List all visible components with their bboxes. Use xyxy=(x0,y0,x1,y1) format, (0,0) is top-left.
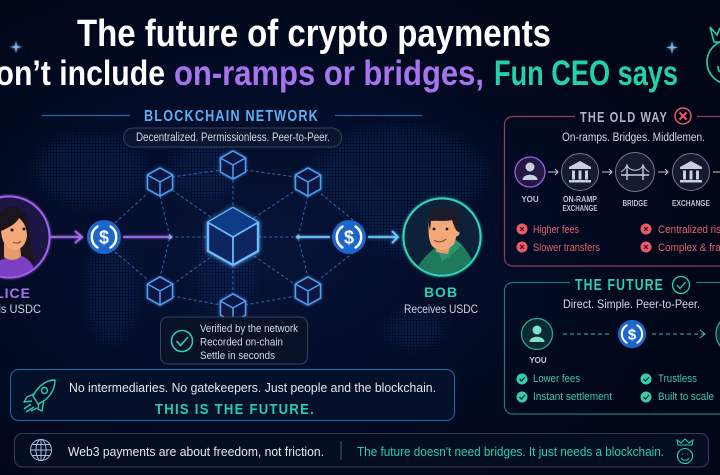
flow step: bridge xyxy=(616,152,654,208)
flow: dashed arrow xyxy=(563,330,705,338)
flow step: on-ramp exchange: EXCHANGE xyxy=(562,204,598,213)
arrow: alice to coin xyxy=(50,231,170,243)
list: benefits: Trustless xyxy=(658,373,697,385)
icon: globe xyxy=(30,440,52,460)
icon: rocket xyxy=(24,380,55,412)
alice avatar xyxy=(0,196,50,285)
verification box: Recorded on-chain xyxy=(200,336,283,348)
node dots xyxy=(168,235,300,239)
flow step: you: YOU xyxy=(521,195,539,204)
network cubes xyxy=(148,151,320,322)
flow arrows xyxy=(548,169,720,175)
list: drawbacks xyxy=(516,224,720,254)
alice label xyxy=(0,285,41,316)
icon: verified check xyxy=(172,330,192,352)
flow step: you xyxy=(515,157,545,204)
usdc coin left xyxy=(87,220,121,254)
title: The future of crypto payments xyxy=(77,13,551,55)
list: benefits: Built to scale xyxy=(658,391,714,403)
verification box xyxy=(160,317,308,364)
verification box: Verified by the network xyxy=(200,323,298,335)
usdc coin right xyxy=(332,220,366,254)
heading: blockchain network: BLOCKCHAIN NETWORK xyxy=(144,108,319,125)
flow step: on-ramp exchange: ON-RAMP xyxy=(563,195,598,204)
central cube xyxy=(208,208,258,265)
heading: the old way: THE OLD WAY xyxy=(580,109,668,126)
panel: no intermediaries callout: THIS IS THE FUTURE. xyxy=(155,401,315,418)
list: benefits: Lower fees xyxy=(533,373,580,385)
pill: network tagline xyxy=(124,128,342,147)
usdc coin xyxy=(618,320,646,348)
bob label: Receives USDC xyxy=(404,302,478,316)
flow step: bridge: BRIDGE xyxy=(622,199,648,208)
verification box: Settle in seconds xyxy=(200,350,275,362)
heading: the future: THE FUTURE xyxy=(575,277,664,294)
arrow: coin to bob xyxy=(298,231,398,243)
icon: crowned smiley xyxy=(677,439,693,464)
flow step: on-ramp exchange xyxy=(562,154,598,213)
dotted world map xyxy=(32,123,488,352)
bob avatar xyxy=(404,198,480,285)
panel: the old way: On-ramps. Bridges. Middlemen. xyxy=(562,132,705,144)
panel: the future: Direct. Simple. Peer-to-Peer. xyxy=(563,299,700,311)
flow: you: YOU xyxy=(529,356,547,365)
panel: no intermediaries callout xyxy=(10,370,454,420)
panel: the future xyxy=(504,276,720,414)
flow: recipient node xyxy=(716,315,720,353)
sparkle stars xyxy=(10,41,678,54)
title xyxy=(0,13,678,93)
bob label xyxy=(404,284,478,316)
panel: footer banner: The future doesn't need bridges. It just needs a blockchain. xyxy=(357,444,664,459)
panel: footer banner xyxy=(14,434,708,467)
list: drawbacks: Higher fees xyxy=(533,224,579,236)
flow: you xyxy=(522,318,552,365)
bob label: BOB xyxy=(424,284,458,300)
network links xyxy=(115,170,354,305)
icon: crown smiley top right xyxy=(707,27,720,84)
icon: red x xyxy=(675,108,691,124)
list: drawbacks: Slower transfers xyxy=(533,242,600,254)
flow step: exchange xyxy=(672,154,711,208)
flow step: exchange: EXCHANGE xyxy=(672,199,711,208)
title: on-ramps or bridges, xyxy=(174,54,484,93)
pill: network tagline: Decentralized. Permissionless. Peer-to-Peer. xyxy=(136,132,330,144)
list: benefits: Instant settlement xyxy=(533,391,612,403)
list: benefits xyxy=(516,373,714,403)
panel: footer banner: Web3 payments are about freedom, not friction. xyxy=(68,444,324,459)
icon: teal check xyxy=(672,276,690,294)
panel: the old way xyxy=(504,108,720,266)
panel: no intermediaries callout: No intermediaries. No gatekeepers. Just people and the blockchain. xyxy=(69,380,436,395)
